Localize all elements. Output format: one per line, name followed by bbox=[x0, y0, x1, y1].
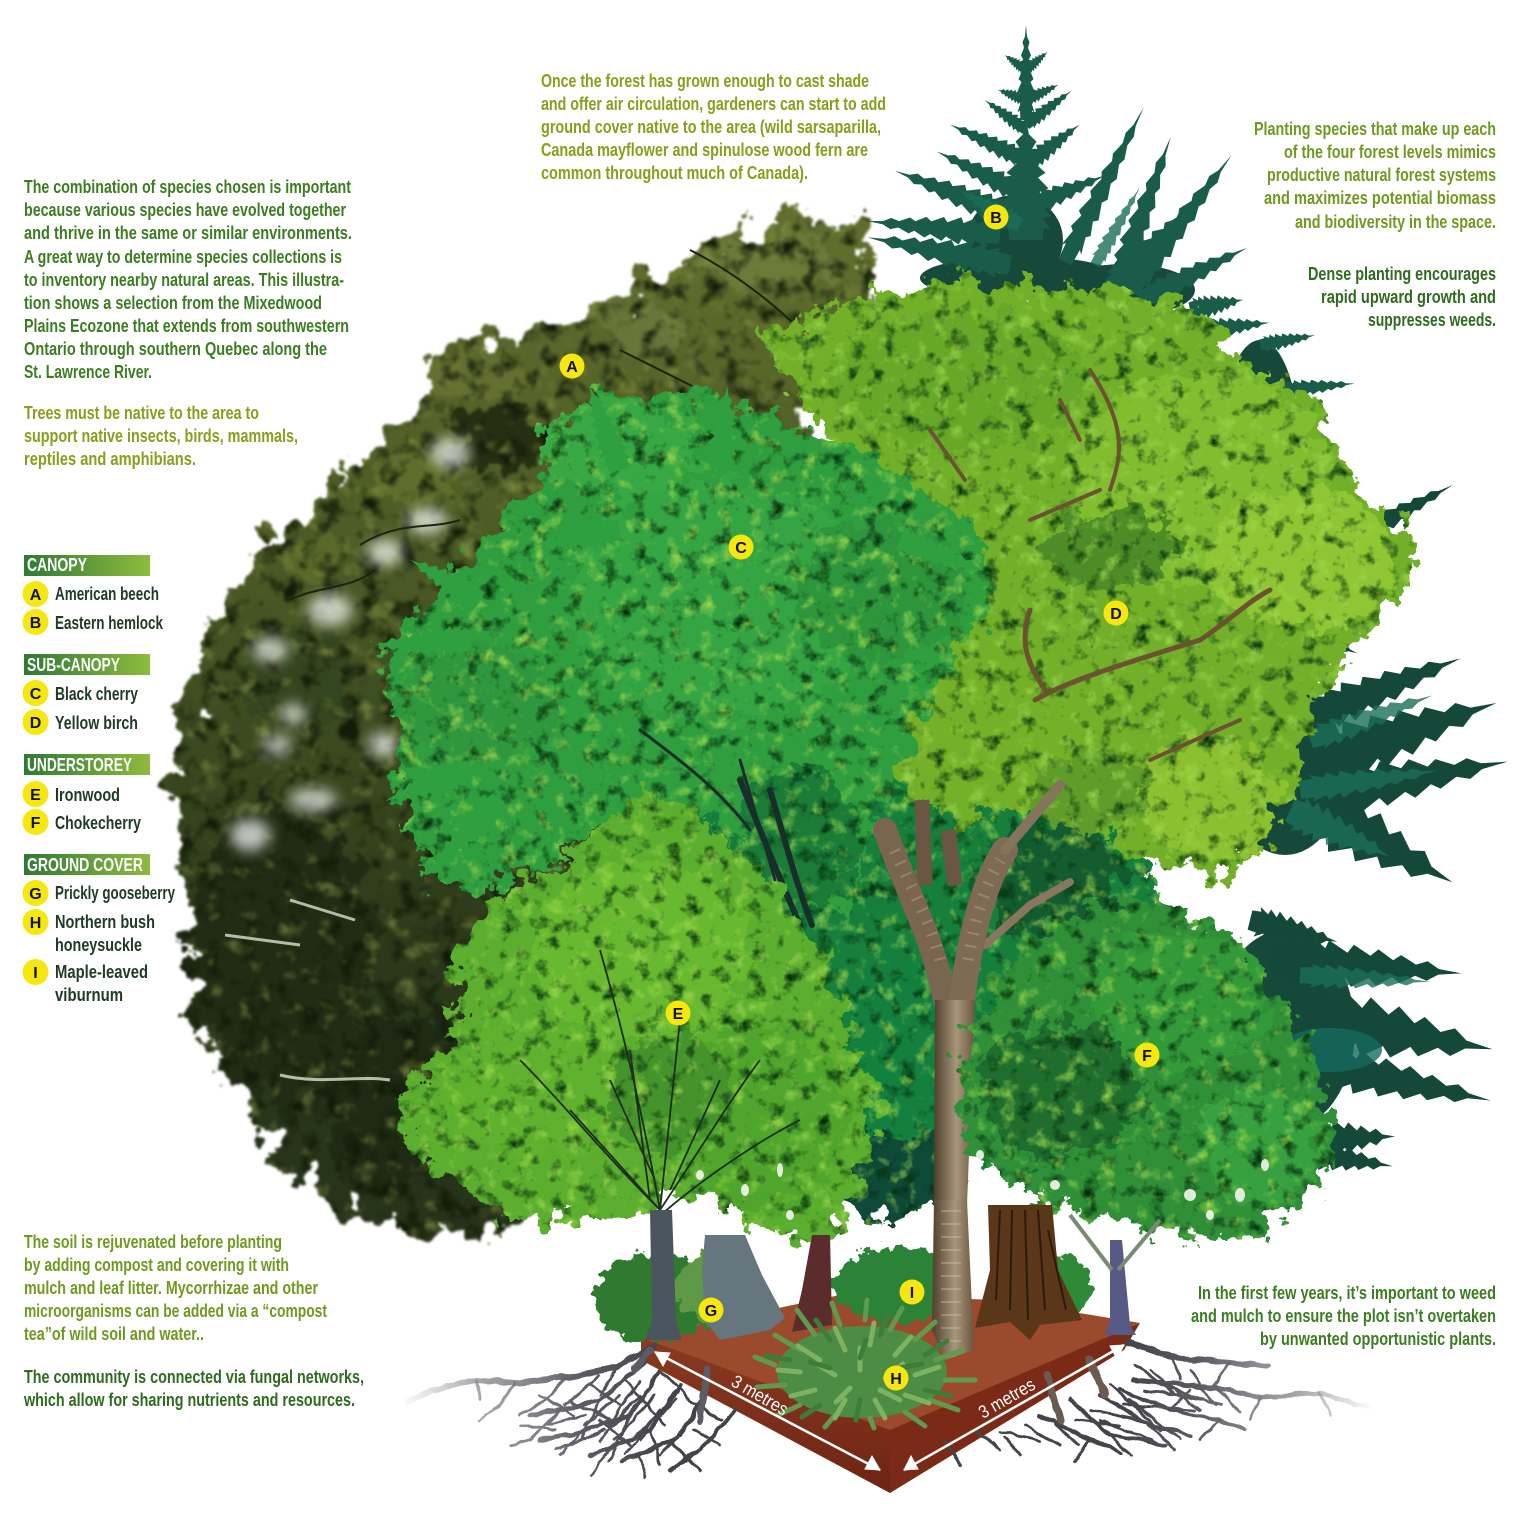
legend: sub-canopy: Yellow birch bbox=[55, 712, 138, 733]
marker I bbox=[900, 1280, 924, 1304]
text: species combination: Ontario through southern Quebec along the bbox=[24, 338, 327, 359]
legend: ground cover: GROUND COVER bbox=[27, 854, 143, 875]
text: native trees: Trees must be native to the area to bbox=[24, 402, 259, 423]
legend: canopy: American beech bbox=[55, 583, 159, 604]
marker H bbox=[884, 1366, 908, 1390]
text: soil: microorganisms can be added via a “compost bbox=[24, 1300, 327, 1321]
marker D bbox=[1104, 600, 1128, 626]
text: ground cover: Once the forest has grown enough to cast shade bbox=[541, 70, 869, 91]
leaf gaps in the lower crowns bbox=[696, 1150, 1269, 1220]
legend: sub-canopy: C bbox=[30, 686, 42, 703]
text: fungal networks: The community is connected via fungal networks, bbox=[24, 1366, 364, 1387]
text: species combination: tion shows a selection from the Mixedwood bbox=[24, 292, 322, 313]
label: 3 metres left: 3 metres bbox=[728, 1371, 792, 1419]
text: soil: tea”of wild soil and water.. bbox=[24, 1323, 204, 1344]
legend: ground cover: honeysuckle bbox=[55, 934, 142, 955]
arrow: left side bbox=[655, 1352, 880, 1470]
legend: canopy: B bbox=[30, 615, 41, 632]
hemlock right fronds bbox=[1243, 474, 1512, 1181]
text: dense planting bbox=[1308, 263, 1496, 330]
legend: ground cover: Northern bush bbox=[55, 911, 155, 932]
text: soil bbox=[24, 1231, 327, 1344]
text: ground cover bbox=[541, 70, 886, 183]
legend: ground cover: G bbox=[29, 886, 42, 903]
marker I: I bbox=[910, 1285, 914, 1302]
legend: understorey bbox=[22, 754, 150, 835]
marker B: B bbox=[990, 210, 1002, 227]
legend: ground cover: Prickly gooseberry bbox=[55, 882, 176, 903]
marker G: G bbox=[705, 1303, 717, 1320]
marker G bbox=[698, 1298, 724, 1322]
text: fungal networks: which allow for sharing nutrients and resources. bbox=[23, 1389, 355, 1410]
ironwood twigs bbox=[520, 950, 800, 1220]
marker A: A bbox=[566, 359, 578, 376]
legend: understorey: Chokecherry bbox=[55, 812, 142, 833]
marker C bbox=[728, 534, 754, 560]
legend: sub-canopy: SUB-CANOPY bbox=[27, 654, 120, 675]
hemlock upper fronds bbox=[865, 25, 1355, 398]
trunk: chokecherry bbox=[1105, 1240, 1136, 1335]
trunk: yellow birch bbox=[885, 785, 1070, 1205]
text: ground cover: ground cover native to the area (wild sarsaparilla, bbox=[541, 116, 881, 137]
text: native trees: support native insects, birds, mammals, bbox=[24, 425, 298, 446]
shrub H: northern bush honeysuckle bbox=[755, 1300, 975, 1428]
trunk: beech bbox=[702, 1235, 785, 1340]
legend: canopy bbox=[22, 554, 164, 635]
legend: ground cover: viburnum bbox=[55, 984, 123, 1005]
legend: ground cover: Maple-leaved bbox=[55, 961, 148, 982]
legend: understorey: Ironwood bbox=[55, 784, 120, 805]
text: soil: by adding compost and covering it with bbox=[24, 1254, 289, 1275]
trunk: cherry bbox=[792, 1235, 832, 1332]
marker A bbox=[560, 354, 584, 378]
soil block bbox=[641, 1295, 1140, 1493]
trunk: ironwood bbox=[645, 1210, 682, 1340]
legend: ground cover: H bbox=[30, 915, 41, 932]
text: soil: mulch and leaf litter. Mycorrhizae and other bbox=[24, 1277, 318, 1298]
legend: sub-canopy: D bbox=[30, 715, 41, 732]
text: dense planting: rapid upward growth and bbox=[1321, 286, 1496, 307]
text: native trees: reptiles and amphibians. bbox=[24, 448, 196, 469]
text: dense planting: suppresses weeds. bbox=[1368, 309, 1496, 330]
legend bbox=[22, 554, 176, 1005]
text: species combination: A great way to determine species collections is bbox=[24, 246, 342, 267]
legend: sub-canopy bbox=[22, 654, 150, 735]
legend: ground cover bbox=[22, 854, 176, 1005]
marker E bbox=[666, 1000, 690, 1026]
label: 3 metres right: 3 metres bbox=[975, 1374, 1039, 1422]
shadow interior behind the trunks bbox=[640, 690, 1160, 1220]
legend: understorey: UNDERSTOREY bbox=[27, 754, 132, 775]
text: soil: The soil is rejuvenated before planting bbox=[24, 1231, 282, 1252]
tree A: American beech bbox=[170, 215, 880, 1235]
legend: canopy: A bbox=[30, 587, 42, 604]
marker E: E bbox=[673, 1006, 684, 1023]
roots: left bbox=[406, 1345, 735, 1478]
text: species combination: The combination of species chosen is important bbox=[24, 176, 351, 197]
marker C: C bbox=[735, 540, 747, 557]
tree D: yellow birch bbox=[760, 280, 1425, 880]
dimension arrows bbox=[655, 1345, 1124, 1470]
legend: understorey: F bbox=[31, 815, 41, 832]
trunks of lower trees bbox=[645, 845, 1160, 1360]
marker D: D bbox=[1110, 606, 1122, 623]
tree F: chokecherry bbox=[960, 895, 1335, 1240]
legend: ground cover: I bbox=[33, 965, 38, 982]
legend: canopy: Eastern hemlock bbox=[55, 612, 164, 633]
text: species combination bbox=[24, 176, 352, 382]
tree markers bbox=[560, 204, 1160, 1390]
roots bbox=[406, 1342, 1369, 1478]
hemlock teal highlights bbox=[954, 181, 1441, 1072]
cherry fronds at the crown edge bbox=[374, 380, 989, 882]
text: species combination: because various species have evolved together bbox=[24, 199, 346, 220]
arrow: right side bbox=[904, 1345, 1124, 1470]
shrub I: maple-leaved viburnum bbox=[832, 1247, 1092, 1323]
legend: sub-canopy: Black cherry bbox=[55, 683, 139, 704]
shrub G: prickly gooseberry bbox=[593, 1254, 757, 1342]
text: ground cover: Canada mayflower and spinulose wood fern are bbox=[541, 139, 868, 160]
tree E: ironwood bbox=[395, 790, 880, 1250]
text: species combination: St. Lawrence River. bbox=[24, 361, 152, 382]
roots: right bbox=[945, 1342, 1369, 1465]
text: weeding bbox=[1191, 1282, 1496, 1349]
legend: understorey: E bbox=[30, 787, 41, 804]
text: species combination: and thrive in the same or similar environments. bbox=[24, 222, 352, 243]
marker F bbox=[1134, 1042, 1160, 1068]
tree C: black cherry bbox=[374, 380, 990, 925]
text: four forest levels bbox=[1254, 118, 1496, 232]
trunk: birch base bbox=[932, 1200, 974, 1360]
marker B bbox=[984, 204, 1008, 230]
text: species combination: to inventory nearby natural areas. This illustra- bbox=[24, 269, 344, 290]
beech canopy gaps bbox=[230, 439, 470, 851]
text: ground cover: and offer air circulation, gardeners can start to add bbox=[541, 93, 886, 114]
marker F: F bbox=[1142, 1048, 1152, 1065]
legend: canopy: CANOPY bbox=[27, 554, 87, 575]
marker H: H bbox=[890, 1371, 902, 1388]
tree B: eastern hemlock bbox=[865, 25, 1512, 1181]
text: ground cover: common throughout much of Canada). bbox=[541, 162, 808, 183]
trunk: oak bbox=[975, 1205, 1082, 1340]
text: species combination: Plains Ecozone that extends from southwestern bbox=[24, 315, 349, 336]
hemlock crown core bbox=[920, 195, 1355, 1130]
text: fungal networks bbox=[23, 1366, 364, 1410]
text: native trees bbox=[24, 402, 298, 469]
